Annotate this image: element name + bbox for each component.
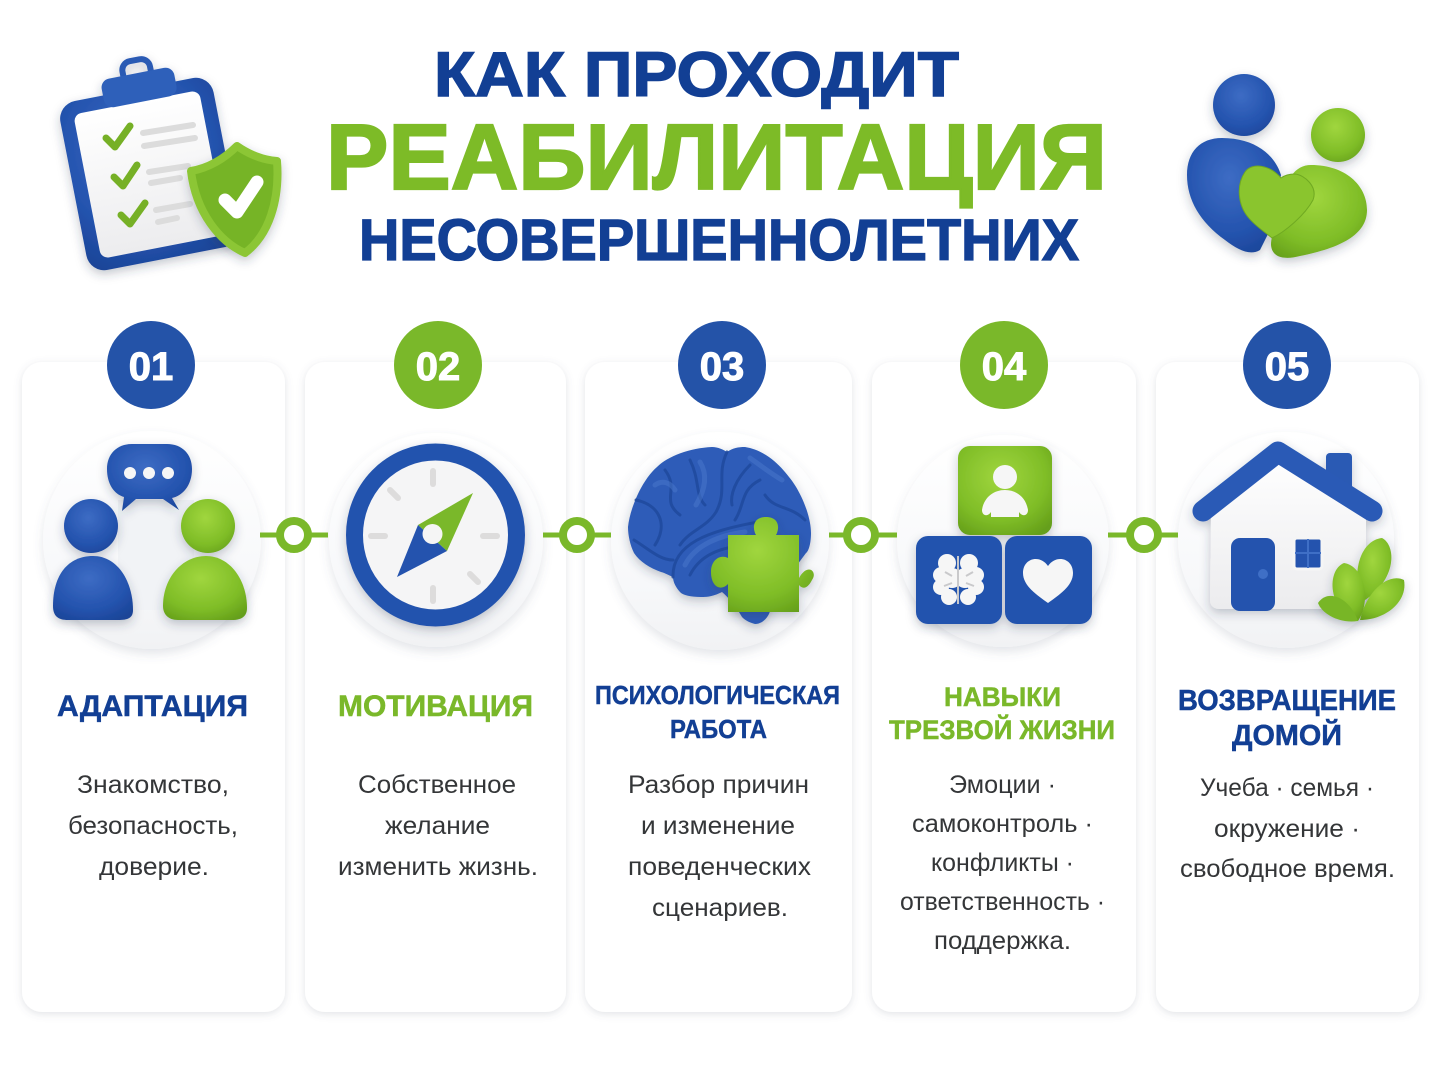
card	[585, 362, 852, 1012]
description: конфликты ·	[931, 849, 1074, 877]
connector 2 to 3	[543, 521, 611, 549]
white brain glyph	[933, 554, 984, 605]
heading: НАВЫКИ	[944, 682, 1061, 712]
description	[900, 771, 1105, 955]
description	[338, 771, 538, 881]
number badge 05	[1243, 321, 1331, 409]
description	[1180, 774, 1395, 883]
card	[22, 362, 285, 1012]
heading: ТРЕЗВОЙ ЖИЗНИ	[889, 714, 1115, 745]
title	[326, 40, 1107, 273]
icon: family with heart	[1187, 74, 1367, 258]
description: окружение ·	[1214, 815, 1360, 843]
description: Учеба · семья ·	[1200, 774, 1374, 802]
description: поддержка.	[934, 927, 1071, 955]
number badge 01	[107, 321, 195, 409]
icon: compass	[329, 433, 543, 647]
description: и изменение	[641, 812, 795, 840]
number badge 03: 03	[700, 345, 744, 389]
heading: АДАПТАЦИЯ	[57, 690, 248, 723]
number badge 04	[960, 321, 1048, 409]
number badge 05: 05	[1265, 345, 1309, 389]
heading: МОТИВАЦИЯ	[338, 690, 533, 723]
number badge 01: 01	[129, 345, 173, 389]
description: сценариев.	[652, 894, 788, 922]
heading: ВОЗВРАЩЕНИЕ	[1178, 685, 1396, 717]
panel: step 4 sober life skills	[872, 321, 1136, 1012]
number badge 03	[678, 321, 766, 409]
title line 1: КАК ПРОХОДИТ	[434, 40, 959, 110]
number badge 02: 02	[416, 345, 460, 389]
description: Знакомство,	[77, 771, 229, 799]
description: изменить жизнь.	[338, 853, 538, 881]
description	[68, 771, 238, 881]
heading	[889, 682, 1115, 745]
icon: house with plant	[1178, 432, 1404, 648]
panel: step 5 return home	[1156, 321, 1419, 1012]
description: ответственность ·	[900, 888, 1105, 916]
heading	[1178, 685, 1396, 752]
connector 1 to 2	[260, 521, 328, 549]
heading: ДОМОЙ	[1232, 718, 1342, 752]
card	[305, 362, 566, 1012]
plant leaves	[1318, 538, 1404, 622]
connector 4 to 5	[1108, 521, 1178, 549]
heading: ПСИХОЛОГИЧЕСКАЯ	[595, 680, 840, 710]
title line 3: НЕСОВЕРШЕННОЛЕТНИХ	[359, 208, 1079, 273]
icon: two people talking	[43, 431, 261, 649]
checklist lines	[143, 125, 195, 222]
checklist marks	[106, 126, 145, 224]
icon: three blocks	[897, 435, 1109, 647]
description: Разбор причин	[628, 771, 809, 799]
icon: clipboard with shield	[57, 58, 277, 273]
title line 2: РЕАБИЛИТАЦИЯ	[326, 105, 1107, 209]
description: Собственное	[358, 771, 516, 799]
panel: step 2 motivation	[305, 321, 566, 1012]
icon: brain with puzzle piece	[611, 432, 829, 650]
description: свободное время.	[1180, 855, 1395, 883]
description: поведенческих	[628, 853, 812, 881]
panel: step 3 psychological work	[585, 321, 852, 1012]
clipboard board	[57, 58, 243, 273]
description: безопасность,	[68, 812, 238, 840]
description: желание	[385, 812, 490, 840]
number badge 02	[394, 321, 482, 409]
shield	[191, 146, 277, 253]
heading: РАБОТА	[670, 714, 767, 744]
connector 3 to 4	[829, 521, 897, 549]
description: Эмоции ·	[949, 771, 1056, 799]
panel: step 1 adaptation	[22, 321, 285, 1012]
card	[872, 362, 1136, 1012]
description	[628, 771, 812, 922]
description: доверие.	[99, 853, 209, 881]
number badge 04: 04	[982, 345, 1027, 389]
heading	[595, 680, 840, 744]
description: самоконтроль ·	[912, 810, 1093, 838]
card	[1156, 362, 1419, 1012]
